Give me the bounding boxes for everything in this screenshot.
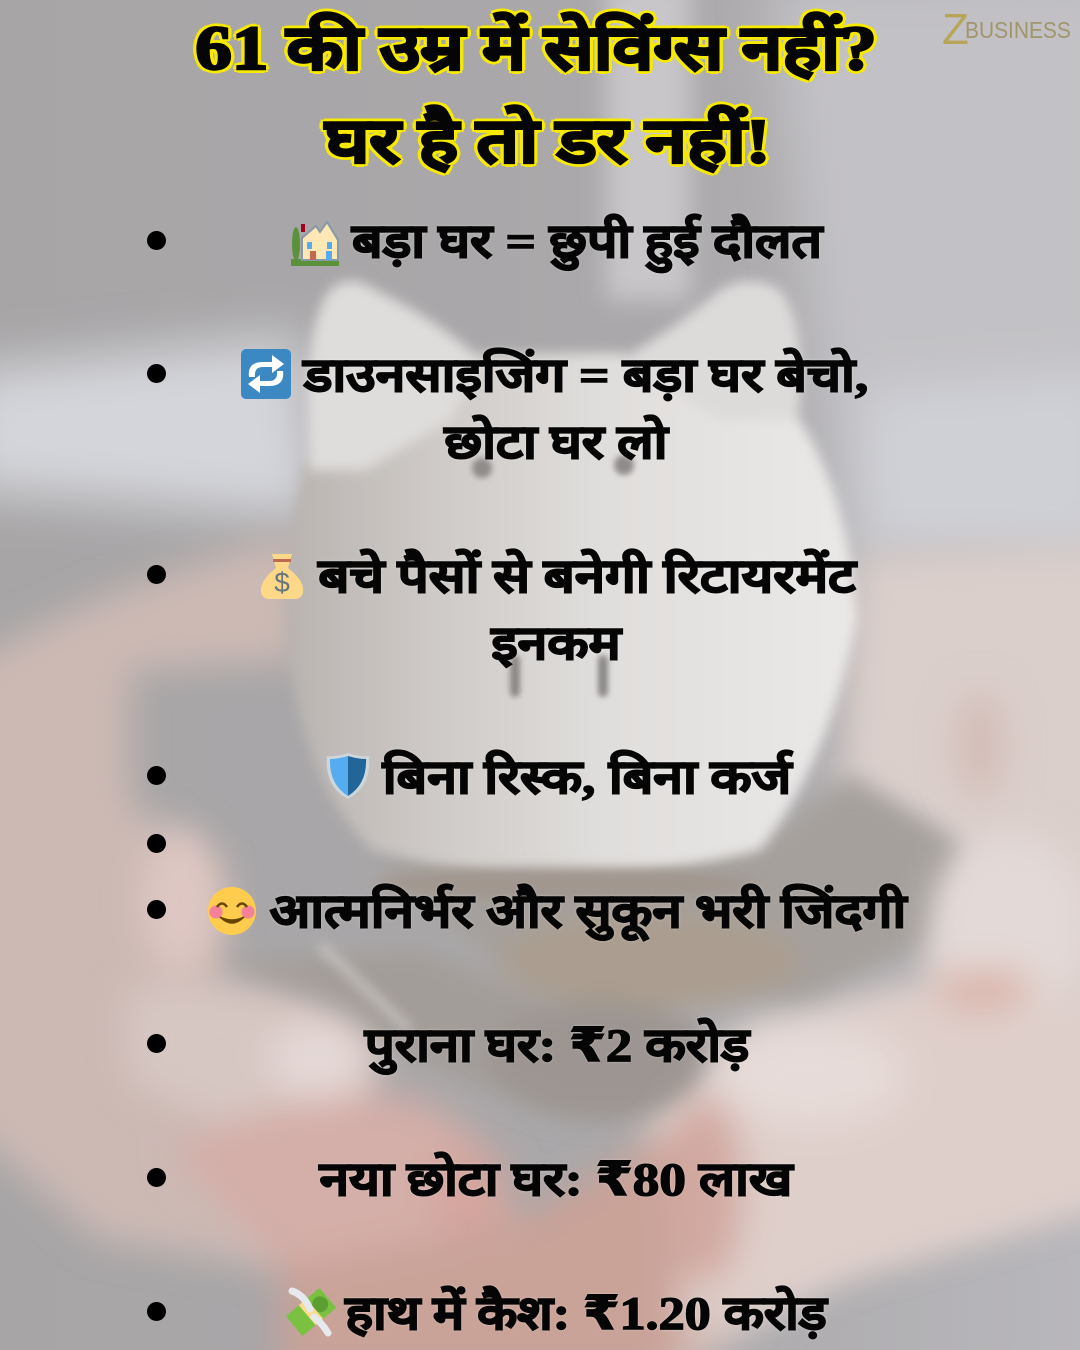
logo: Z Business: Z	[942, 5, 969, 54]
empty bullet	[147, 834, 166, 853]
list item: retirement income	[147, 548, 858, 670]
piggy bank	[286, 281, 857, 875]
right hand mass	[650, 545, 1080, 1350]
coins	[225, 950, 540, 1110]
list item: cash in hand: हाथ में कैश: ₹1.20 करोड़	[345, 1288, 827, 1340]
title	[193, 8, 878, 176]
right lower hand	[680, 990, 1080, 1335]
list item: hidden wealth	[147, 212, 824, 274]
title: घर है तो डर नहीं!	[325, 108, 771, 176]
fingertip and thumbs	[142, 828, 218, 972]
list item: retirement income: बचे पैसों से बनेगी रिटायरमेंट	[318, 551, 856, 603]
list item: downsizing: डाउनसाइजिंग = बड़ा घर बेचो,	[304, 350, 868, 402]
list item: new small home	[147, 1150, 795, 1206]
icon: house	[291, 220, 339, 266]
list item: no risk no debt: बिना रिस्क, बिना कर्ज	[383, 752, 791, 804]
icon: money with wings	[286, 1288, 336, 1336]
list item: cash in hand	[147, 1284, 829, 1340]
left hand mass	[0, 535, 380, 1270]
icon: money bag	[260, 554, 304, 599]
list item: self-reliant life: आत्मनिर्भर और सुकून भरी जिंदगी	[270, 886, 906, 938]
logo: Z Business	[942, 5, 1071, 54]
list item: downsizing	[147, 346, 868, 469]
list item: hidden wealth: बड़ा घर = छुपी हुई दौलत	[352, 216, 822, 268]
list item: old home: पुराना घर: ₹2 करोड़	[365, 1020, 749, 1072]
gap shadow right	[372, 776, 964, 1000]
icon: shield	[326, 753, 370, 799]
logo: Z Business: BUSINESS	[965, 17, 1071, 43]
bullet list	[147, 212, 910, 1340]
list item: downsizing: छोटा घर लो	[445, 417, 667, 469]
icon: smiling face	[208, 887, 256, 935]
title: 61 की उम्र में सेविंग्स नहीं?	[195, 15, 877, 83]
list item: old home	[147, 1016, 752, 1076]
icon: repeat	[241, 349, 291, 399]
list item: new small home: नया छोटा घर: ₹80 लाख	[320, 1154, 792, 1206]
icon: money bag: $	[274, 567, 290, 598]
list item: retirement income: इनकम	[491, 618, 621, 670]
list item: no risk no debt	[147, 749, 794, 804]
